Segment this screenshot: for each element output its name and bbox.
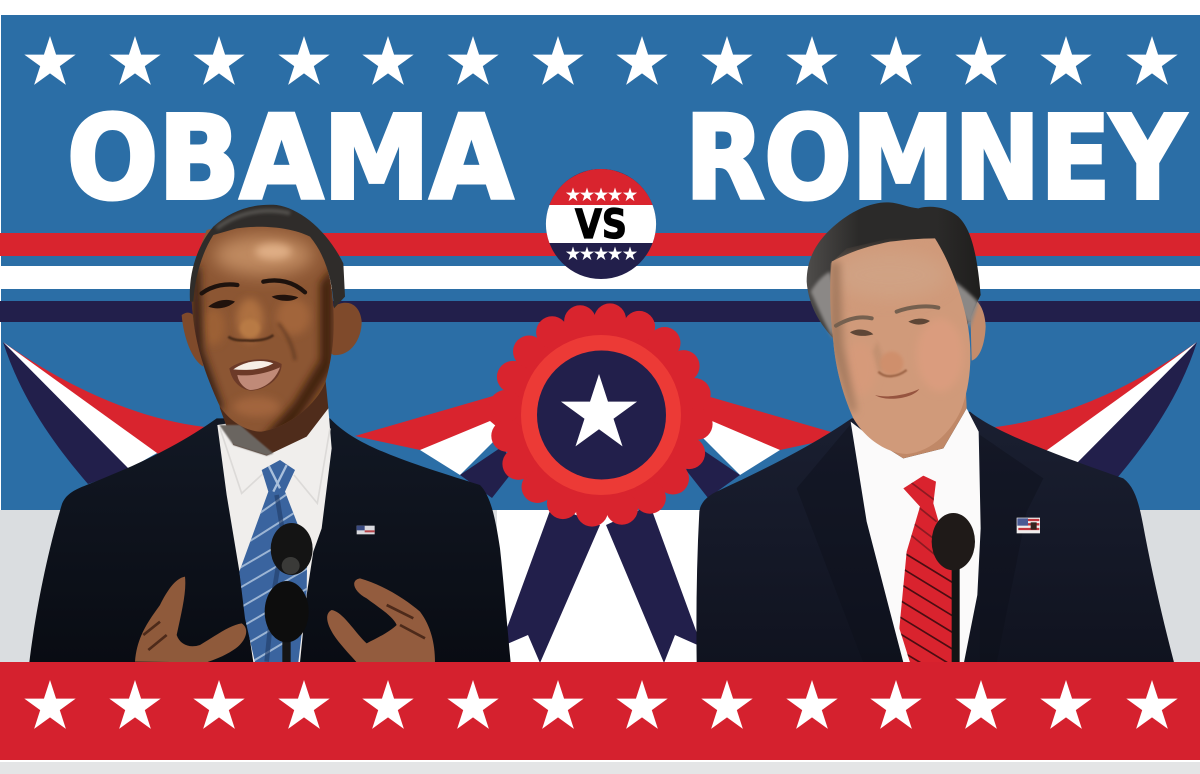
background: blue field — [1, 15, 1200, 511]
VS badge: VS — [575, 202, 627, 248]
face base — [192, 220, 334, 432]
eyes — [850, 319, 930, 336]
hair — [807, 202, 981, 340]
mouth — [229, 359, 282, 391]
suit jacket — [696, 412, 1174, 662]
navy stripe — [0, 301, 1200, 322]
shirt shadow under chin — [219, 425, 273, 456]
microphones — [265, 523, 313, 662]
eyebrows — [202, 280, 305, 293]
nose — [878, 352, 907, 376]
shirt — [851, 408, 981, 662]
title: OBAMA: OBAMA — [67, 92, 513, 226]
face shading — [830, 252, 963, 412]
flag pin — [357, 526, 375, 534]
shirt — [217, 408, 332, 662]
left bunting swag — [3, 342, 205, 484]
tie — [239, 460, 308, 662]
right hand — [327, 578, 435, 662]
face base — [830, 238, 970, 454]
photo figure: Romney — [696, 202, 1174, 668]
ears — [182, 303, 362, 367]
background: lower white centre — [497, 510, 700, 663]
face shading — [192, 235, 333, 440]
right bunting swag — [995, 342, 1197, 484]
VS badge — [546, 169, 656, 279]
red stripe — [0, 233, 1200, 256]
left hand — [135, 577, 246, 662]
top row of stars — [24, 36, 1178, 85]
tie — [899, 476, 952, 662]
mouth — [875, 389, 919, 399]
microphone — [932, 513, 975, 662]
eyebrows — [836, 306, 938, 326]
hair — [190, 205, 345, 308]
grey temples — [811, 272, 978, 339]
neck — [850, 368, 967, 458]
photo figure: Obama — [29, 205, 511, 665]
collar lines — [220, 428, 330, 503]
bottom row of stars — [24, 680, 1178, 729]
head detail — [807, 202, 986, 454]
background: lower grey wall — [0, 510, 1200, 663]
hair highlight — [217, 211, 290, 228]
bottom pale strip — [0, 762, 1200, 774]
lapel shading — [797, 425, 1043, 662]
suit jacket — [29, 418, 511, 662]
white stripe — [0, 266, 1200, 289]
flag pin — [1017, 518, 1040, 533]
rosette hanging tails — [500, 505, 702, 663]
rosette side ribbons — [355, 394, 845, 498]
head detail — [182, 205, 362, 440]
bottom red band — [0, 662, 1200, 760]
rosette badge — [489, 303, 713, 527]
neck — [217, 375, 328, 456]
ear — [970, 298, 986, 361]
eyes — [208, 295, 298, 308]
nose — [228, 319, 273, 341]
